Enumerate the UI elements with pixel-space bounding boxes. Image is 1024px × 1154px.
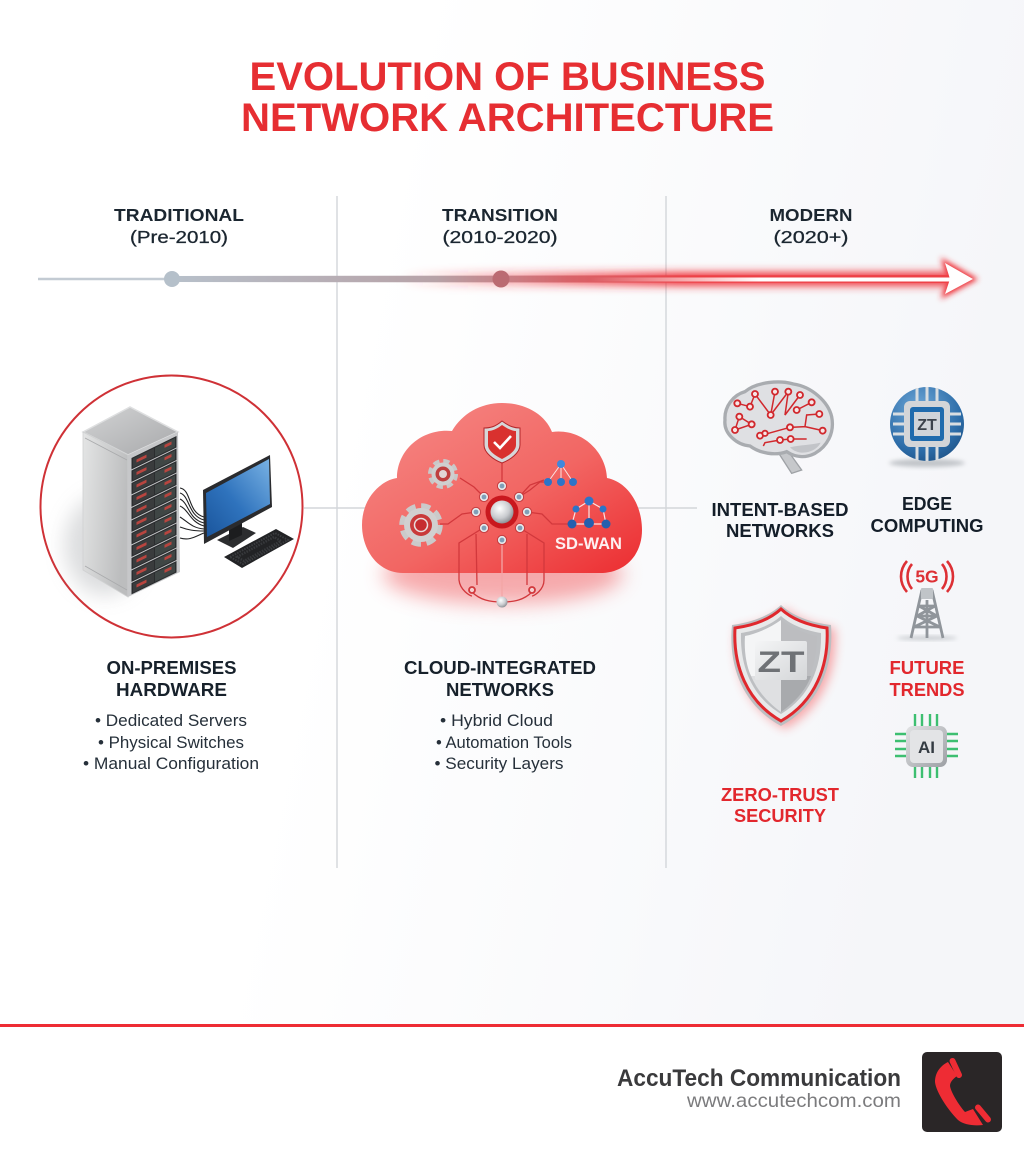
era heading: modern: MODERN [770, 205, 852, 225]
panel: traditional on-premises hardware [40, 376, 302, 638]
list: cloud features [434, 712, 572, 773]
icon: 5G tower: 5G [915, 566, 939, 586]
heading: future trends: FUTURE [890, 658, 964, 678]
heading: cloud-integrated networks [404, 658, 596, 700]
icon: cables [180, 488, 204, 539]
heading: zero-trust security: ZERO-TRUST [721, 785, 839, 805]
list: on-premises features: • Manual Configuration [83, 755, 259, 773]
era heading: traditional: (Pre-2010) [130, 227, 228, 247]
era heading: transition: TRANSITION [442, 205, 558, 225]
heading: intent-based networks [712, 500, 848, 541]
heading: on-premises hardware [106, 658, 236, 700]
heading: intent-based networks: INTENT-BASED [712, 500, 848, 520]
heading: edge computing [870, 494, 984, 536]
rack shadow [65, 495, 145, 595]
panel: cloud-integrated network illustration [362, 403, 642, 608]
era heading: transition [442, 205, 558, 247]
logo: phone [922, 1052, 1002, 1132]
icon: AI chip [895, 714, 958, 778]
title: EVOLUTION OF BUSINESS [250, 55, 766, 99]
icon: SD-WAN network [568, 496, 610, 528]
bottom circuit nodes [469, 587, 535, 608]
circuit lines [440, 460, 570, 602]
era heading: traditional [114, 205, 244, 247]
list: cloud features: • Hybrid Cloud [440, 712, 553, 730]
icon: security shield [484, 421, 520, 463]
label: SD-WAN: SD-WAN [555, 535, 622, 553]
era heading: modern [770, 205, 852, 247]
heading: zero-trust security: SECURITY [734, 806, 826, 826]
heading: zero-trust security [721, 785, 839, 826]
icon: small network [519, 460, 577, 497]
list: cloud features: • Security Layers [434, 755, 564, 773]
title [241, 55, 774, 140]
icon: AI chip: AI [918, 738, 935, 757]
list: on-premises features: • Physical Switches [98, 734, 244, 752]
era heading: modern: (2020+) [774, 227, 848, 247]
heading: cloud-integrated networks: NETWORKS [446, 680, 554, 700]
title: NETWORK ARCHITECTURE [241, 96, 774, 140]
heading: cloud-integrated networks: CLOUD-INTEGRATED [404, 658, 596, 678]
heading: edge computing: COMPUTING [870, 516, 984, 536]
icon: zero-trust shield [731, 605, 835, 729]
circle frame [40, 376, 302, 638]
footer [0, 1024, 1024, 1154]
column dividers [304, 196, 697, 868]
icon: 5G tower [897, 561, 957, 640]
icon: small gear [430, 462, 456, 486]
era heading: transition: (2010-2020) [442, 227, 558, 247]
timeline node: pre-2010 [164, 271, 180, 287]
footer rule [0, 1024, 1024, 1027]
central hub [471, 481, 532, 545]
icon: brain with circuits [725, 382, 832, 473]
heading: intent-based networks: NETWORKS [726, 521, 834, 541]
heading: future trends: TRENDS [890, 680, 964, 700]
list: on-premises features: • Dedicated Servers [95, 712, 247, 730]
company name: AccuTech Communication [617, 1065, 901, 1092]
heading: on-premises hardware: ON-PREMISES [106, 658, 236, 678]
timeline node: 2010-2020 [492, 270, 510, 288]
heading: edge computing: EDGE [902, 494, 952, 514]
icon: server rack [83, 407, 180, 597]
cloud shape [362, 403, 642, 573]
icon: edge computing chip globe: ZT [917, 417, 937, 434]
icon: large gear [402, 506, 440, 544]
icon: desktop monitor [203, 455, 272, 548]
heading: on-premises hardware: HARDWARE [116, 680, 227, 700]
icon: zero-trust shield: ZT [758, 646, 804, 679]
list: on-premises features [83, 712, 259, 773]
icon: edge computing chip globe [889, 387, 965, 467]
cloud glow [383, 544, 623, 604]
icon: keyboard [224, 529, 294, 568]
timeline arrow [38, 263, 973, 294]
website: www.accutechcom.com [686, 1090, 901, 1112]
heading: future trends [890, 658, 964, 700]
list: cloud features: • Automation Tools [436, 734, 572, 752]
era heading: traditional: TRADITIONAL [114, 205, 244, 225]
